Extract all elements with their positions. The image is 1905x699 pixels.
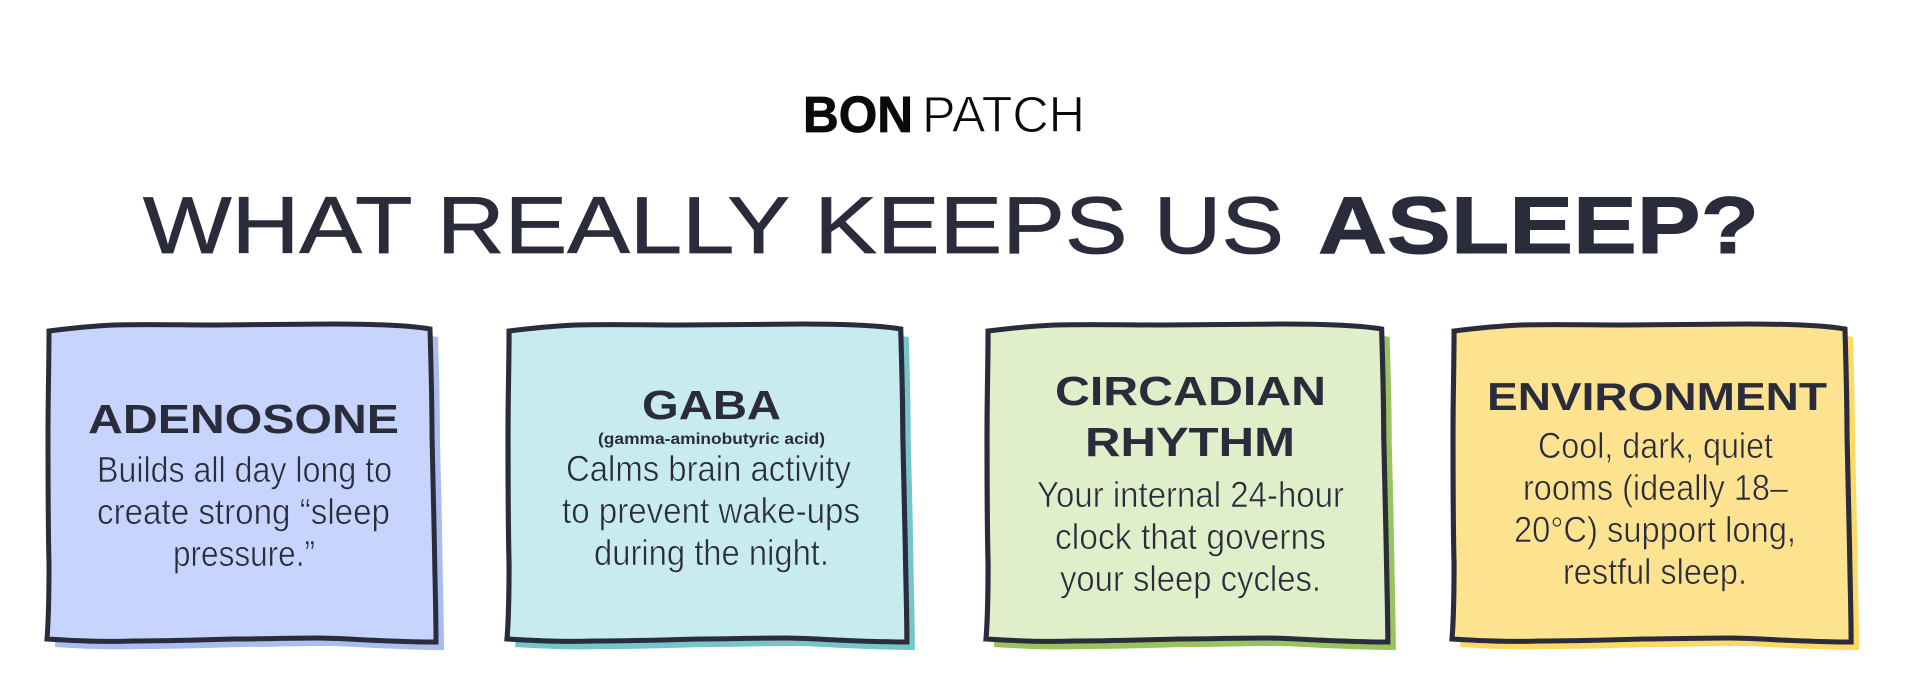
- body text: environment: rooms (ideally 18–: [1523, 467, 1788, 508]
- heading: circadian rhythm: RHYTHM: [1085, 419, 1295, 465]
- card shadow: adenosone: [55, 332, 444, 650]
- panel: GABA: [507, 324, 915, 650]
- body text: circadian rhythm: Your internal 24-hour: [1037, 474, 1344, 515]
- body text: GABA: Calms brain activity: [566, 448, 851, 489]
- title: ASLEEP?: [1318, 181, 1759, 271]
- logo: BONPATCH: BON: [803, 86, 913, 143]
- body text: circadian rhythm: your sleep cycles.: [1060, 558, 1321, 599]
- logo: BONPATCH: [803, 86, 1085, 143]
- subheading: gamma-aminobutyric acid: (gamma-aminobutyric acid): [598, 431, 825, 448]
- logo: BONPATCH: PATCH: [922, 86, 1085, 143]
- card body: environment: [1452, 324, 1851, 642]
- body text: circadian rhythm: clock that governs: [1055, 516, 1326, 557]
- body text: GABA: to prevent wake-ups: [562, 490, 860, 531]
- heading: environment: ENVIRONMENT: [1487, 376, 1827, 419]
- body text: environment: [1514, 425, 1796, 592]
- body text: circadian rhythm: [1037, 474, 1344, 599]
- card body: GABA: [507, 324, 907, 642]
- body text: environment: 20°C) support long,: [1514, 509, 1796, 550]
- card body: adenosone: [47, 324, 436, 642]
- card shadow: environment: [1460, 332, 1859, 650]
- panel: adenosone: [47, 324, 444, 650]
- body text: GABA: during the night.: [594, 532, 829, 573]
- card shadow: circadian rhythm: [994, 332, 1396, 650]
- body text: adenosone: pressure.”: [173, 533, 315, 574]
- body text: adenosone: create strong “sleep: [97, 491, 390, 532]
- panel: circadian rhythm: [986, 324, 1396, 650]
- panel: environment: [1452, 324, 1859, 650]
- title: [143, 181, 1759, 271]
- heading: adenosone: ADENOSONE: [88, 396, 399, 442]
- heading: circadian rhythm: [1055, 368, 1326, 465]
- body text: GABA: [562, 448, 860, 573]
- body text: adenosone: Builds all day long to: [97, 449, 392, 490]
- card shadow: GABA: [515, 332, 915, 650]
- card body: circadian rhythm: [986, 324, 1388, 642]
- heading: circadian rhythm: CIRCADIAN: [1055, 368, 1326, 414]
- body text: environment: Cool, dark, quiet: [1538, 425, 1773, 466]
- title: WHAT REALLY KEEPS US: [143, 181, 1284, 271]
- body text: environment: restful sleep.: [1563, 551, 1747, 592]
- heading: GABA: GABA: [642, 382, 781, 428]
- body text: adenosone: [97, 449, 392, 574]
